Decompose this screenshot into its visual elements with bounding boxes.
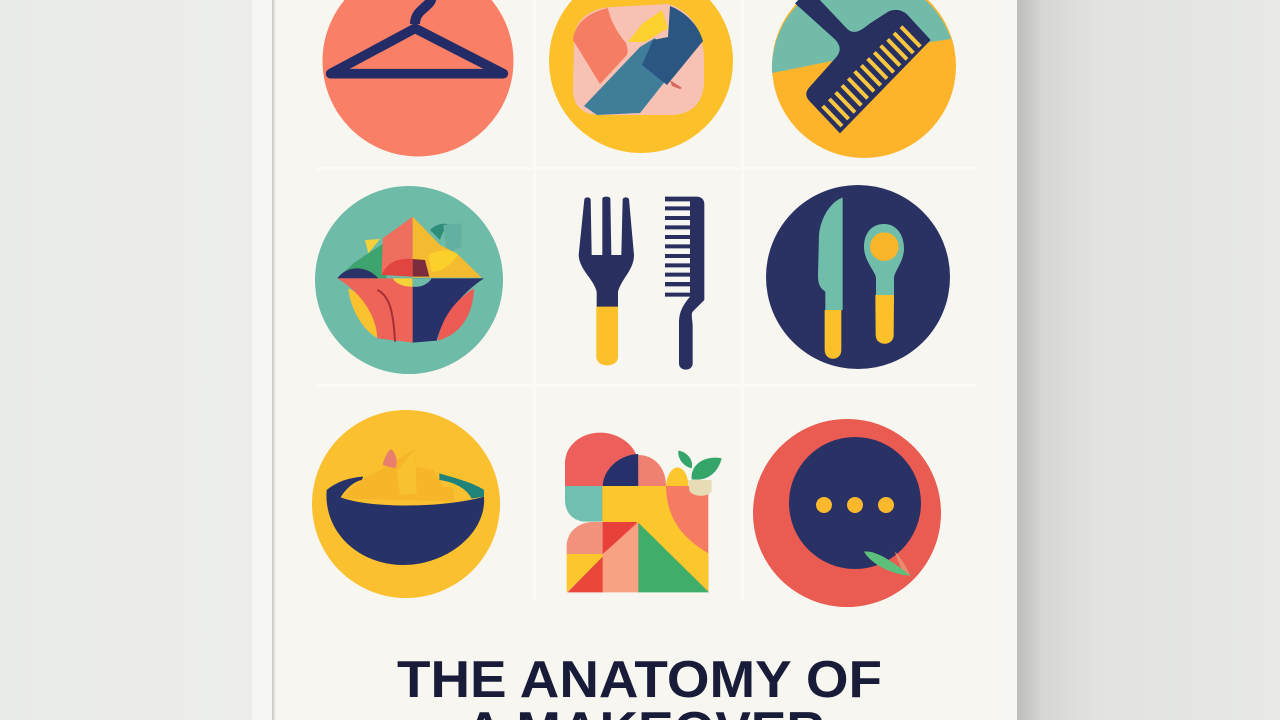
- typing dots: [816, 497, 894, 513]
- icon: folded garment on yellow circle: [549, 0, 733, 153]
- icon: knife and spoon on navy circle: [766, 185, 950, 369]
- icon: coat hanger on coral circle: [322, 0, 514, 156]
- title: THE ANATOMY OF: [397, 651, 882, 709]
- icon: speech bubble on coral circle: [753, 419, 941, 607]
- poster frame: [252, 0, 1017, 720]
- poster paper: [272, 0, 998, 720]
- icon: fork with yellow handle: [579, 197, 634, 365]
- icon: standing comb: [665, 197, 704, 370]
- icon: noodle bowl on yellow circle: [312, 410, 500, 598]
- icon: geometric salad bowl on teal circle: [315, 186, 503, 374]
- icon: comb on teal and yellow circle: [772, 0, 956, 158]
- icon: geometric color-block composition with leaves: [565, 433, 722, 592]
